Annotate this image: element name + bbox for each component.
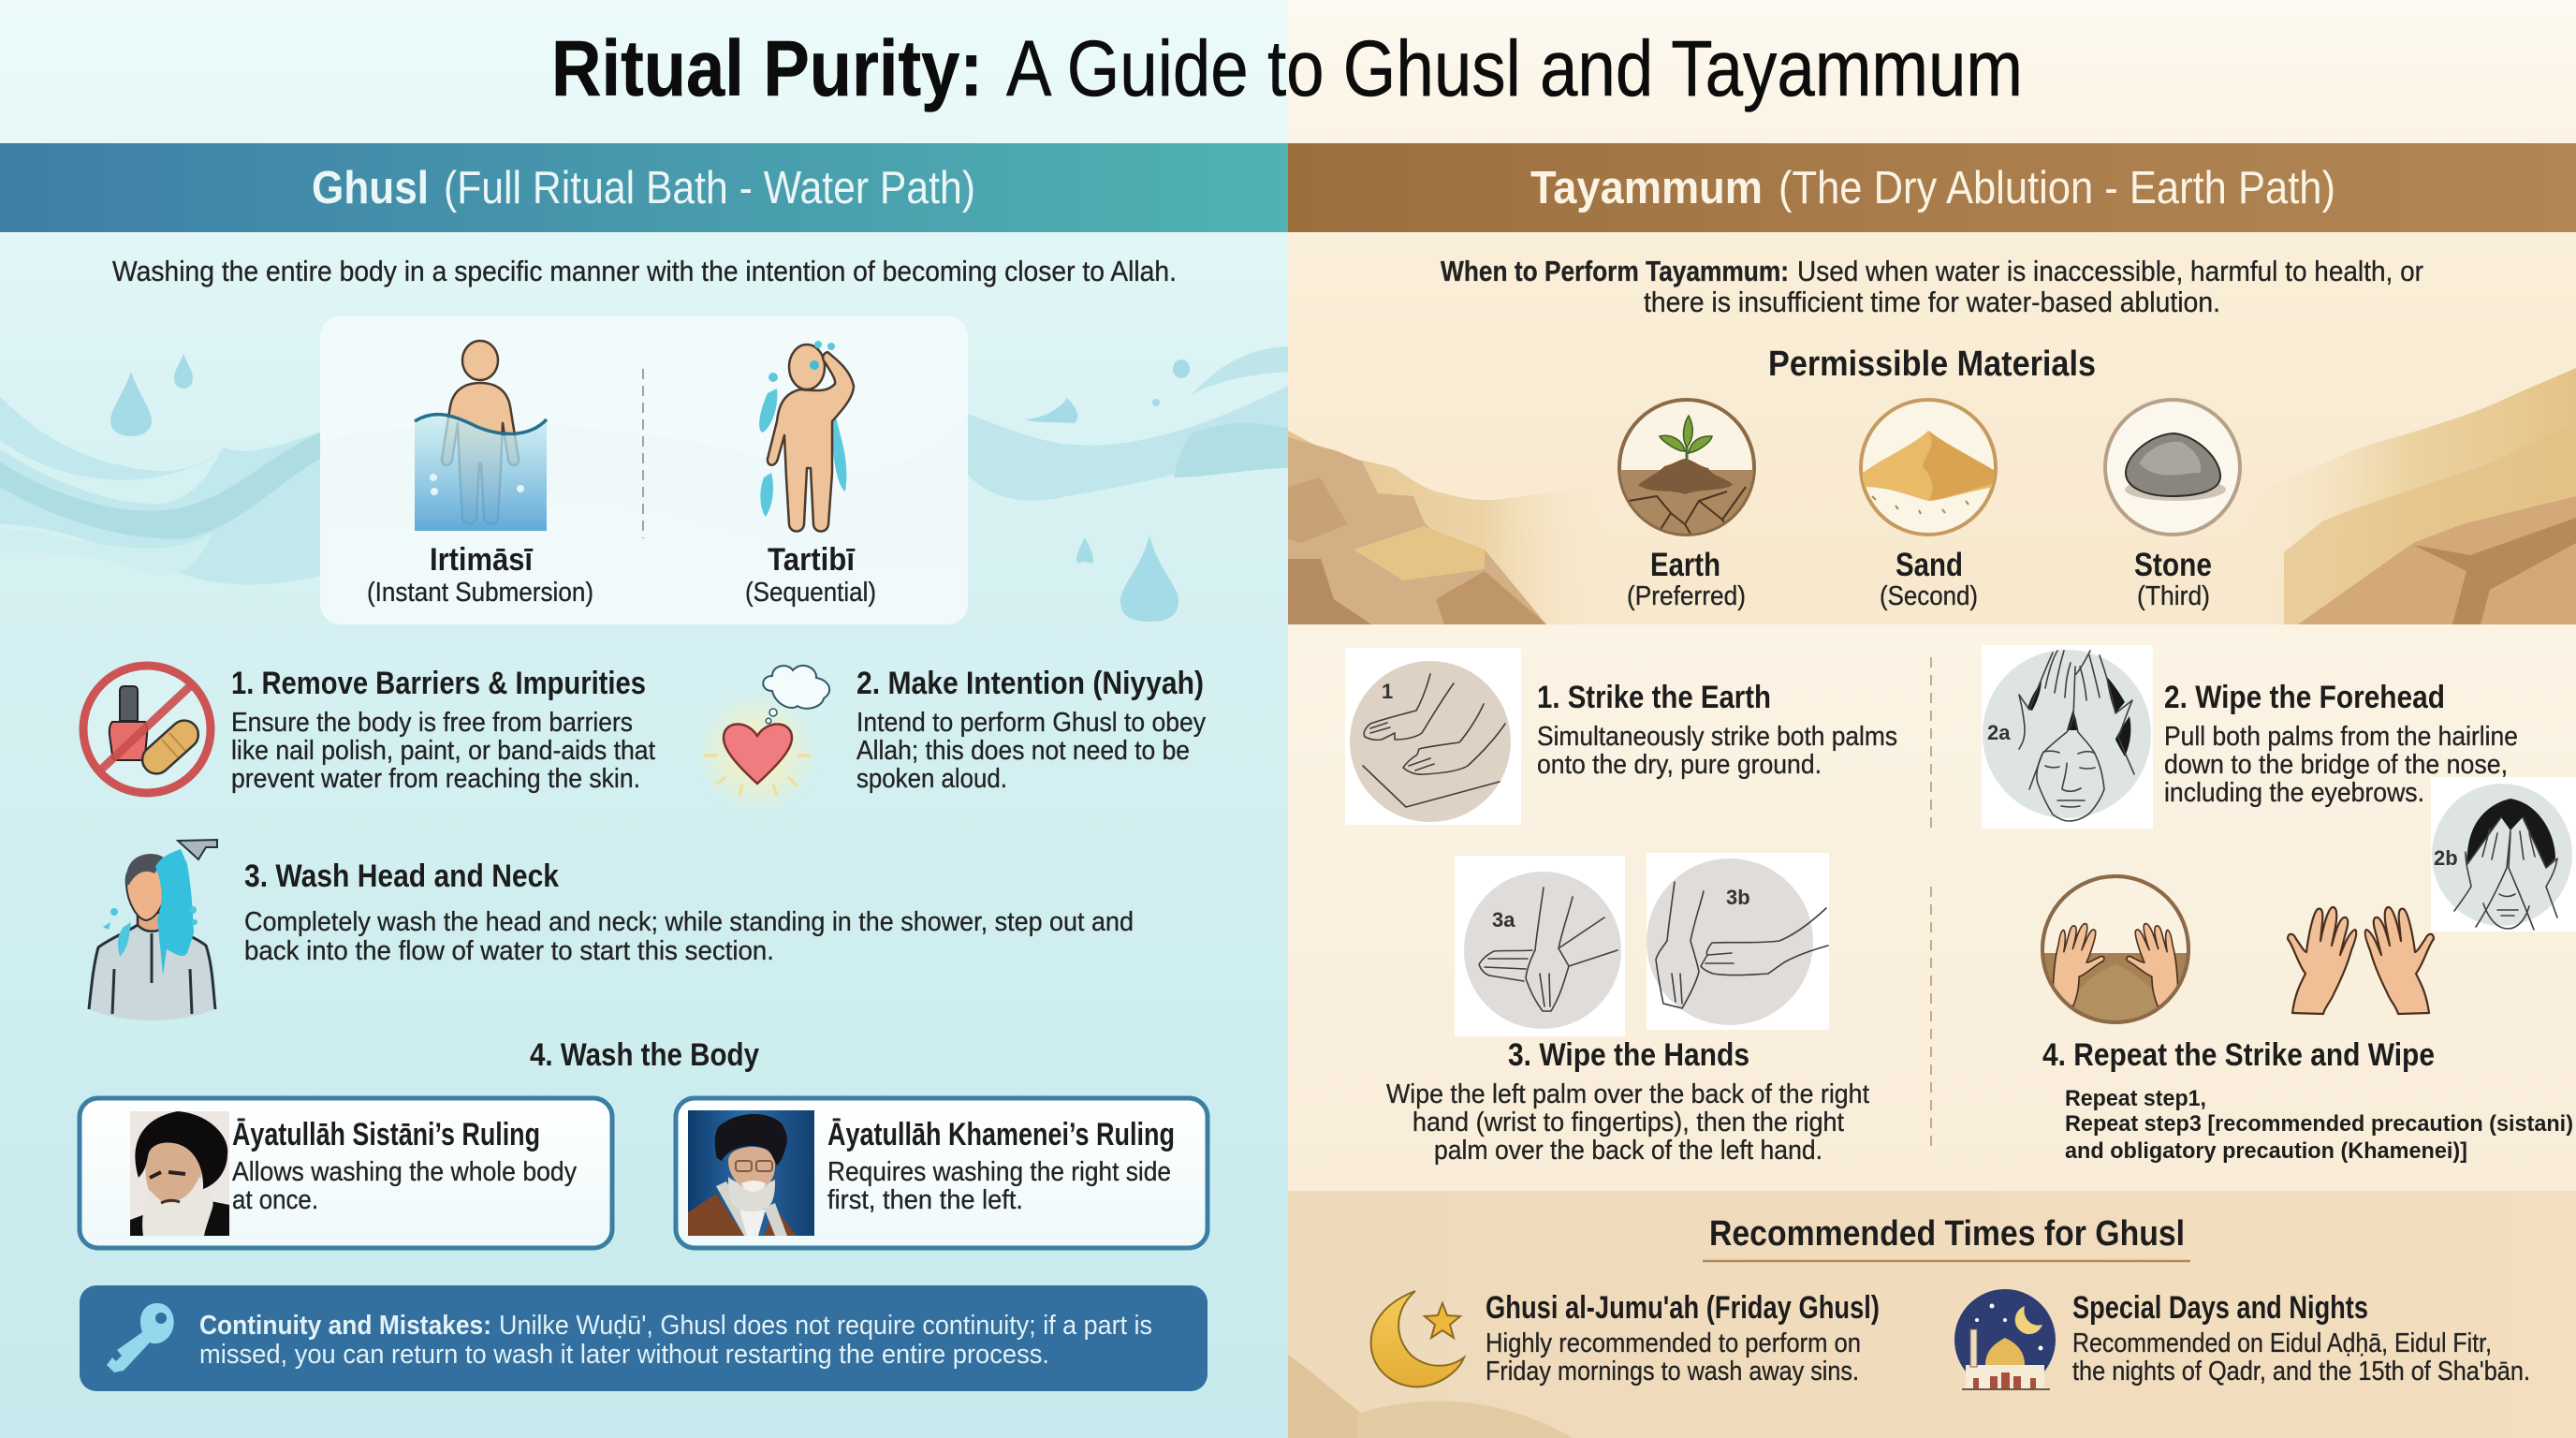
icon: hands on earth — [2032, 876, 2199, 1037]
title — [551, 24, 2023, 112]
step 3: wash head and neck — [89, 840, 1134, 1020]
label: Tartibi — [745, 542, 876, 608]
step 4 heading: wash the body: 4. Wash the Body — [530, 1037, 759, 1073]
panel: ghusl types — [320, 316, 968, 624]
icon: hands striking ground — [1345, 648, 1521, 825]
step 1: remove barriers: prevent water from reaching the skin. — [231, 764, 640, 794]
card: Khamenei ruling: first, then the left. — [827, 1185, 1023, 1215]
step 1: remove barriers — [81, 664, 655, 795]
material: sand — [1861, 400, 1998, 611]
tayammum step 2: wipe the forehead: 2. Wipe the Forehead — [2164, 680, 2445, 715]
title: Ritual Purity: — [551, 24, 983, 112]
tayammum step 4: repeat the strike and wipe: 4. Repeat the Strike and Wipe — [2042, 1037, 2435, 1073]
icon: immersed person — [415, 341, 547, 531]
step 2: make intention — [695, 666, 1206, 814]
step 2: make intention: Allah; this does not need to be — [856, 736, 1190, 766]
tayammum step 1: strike the earth — [1345, 648, 1897, 825]
tayammum step 2: wipe the forehead: Pull both palms from the hairline — [2164, 722, 2518, 752]
heading: permissible materials: Permissible Materials — [1768, 345, 2096, 384]
icon: 2b hands over eyes — [2431, 777, 2576, 932]
decorative water drops — [110, 354, 1190, 622]
tayammum step 2: wipe the forehead — [1982, 645, 2576, 932]
tayammum step 4: repeat the strike and wipe: Repeat step3 [recommended precaution (sistani) — [2065, 1111, 2573, 1137]
portrait: Khamenei — [688, 1110, 814, 1236]
card: Khamenei ruling — [676, 1098, 1208, 1248]
icon: mosque at night — [1954, 1289, 2056, 1390]
tayammum step 3: wipe the hands: palm over the back of the left hand. — [1434, 1136, 1822, 1166]
tayammum step 2: wipe the forehead: down to the bridge of the nose, — [2164, 750, 2508, 780]
recommended: special days and nights: Recommended on Eidul Aḍḥā, Eidul Fitr, — [2072, 1328, 2492, 1358]
label: Irtimasi: (Instant Submersion) — [367, 578, 593, 608]
tayammum step 3: wipe the hands: hand (wrist to fingertips), then the right — [1412, 1108, 1844, 1137]
tayammum step 1: strike the earth: onto the dry, pure ground. — [1537, 750, 1822, 780]
portrait: Sistani — [130, 1111, 229, 1236]
Tayammum: when to perform: When to Perform Tayammum: — [1441, 255, 1789, 287]
dashed dividers — [1930, 657, 1932, 1152]
card: Sistani ruling: at once. — [232, 1185, 318, 1215]
icon: person washing sequentially — [759, 341, 854, 532]
recommended: Friday Ghusl: Ghusi al-Jumu'ah (Friday Ghusl) — [1486, 1290, 1880, 1326]
Tayammum: when to perform — [1441, 255, 2423, 318]
icon: open hands — [2288, 907, 2434, 1014]
icon: heart and thought cloud — [695, 666, 829, 814]
icon: 3b — [1647, 853, 1829, 1030]
icon: 3a: 3a — [1492, 908, 1515, 932]
material: earth — [1615, 400, 1760, 611]
icon: 3b: 3b — [1726, 886, 1750, 909]
label: Irtimasi: Irtimāsī — [430, 542, 533, 578]
icon: no nail polish or band-aid — [81, 664, 212, 795]
step 2: make intention: Intend to perform Ghusl to obey — [856, 708, 1206, 738]
label: Tartibi: (Sequential) — [745, 578, 876, 608]
tayammum step 4: repeat the strike and wipe: and obligatory precaution (Khamenei)] — [2065, 1138, 2467, 1164]
background: earth panel — [1288, 0, 2576, 1438]
step 2: make intention: 2. Make Intention (Niyyah) — [856, 666, 1204, 701]
icon: 3a — [1455, 856, 1625, 1036]
tayammum step 3: wipe the hands — [1386, 853, 1869, 1166]
recommended: Friday Ghusl — [1371, 1290, 1880, 1387]
header: Tayammum: Tayammum — [1530, 163, 1763, 213]
header: Tayammum — [1288, 143, 2576, 232]
card: Sistani ruling: Āyatullāh Sistāni’s Ruling — [232, 1117, 540, 1152]
material: sand: (Second) — [1880, 581, 1978, 611]
material: sand: Sand — [1895, 547, 1963, 583]
recommended: special days and nights — [1954, 1289, 2530, 1390]
tayammum step 1: strike the earth: Simultaneously strike both palms — [1537, 722, 1897, 752]
tayammum step 3: wipe the hands: 3. Wipe the Hands — [1508, 1037, 1749, 1073]
header: Ghusl: (Full Ritual Bath - Water Path) — [444, 163, 975, 213]
recommended: special days and nights: Special Days and Nights — [2072, 1290, 2368, 1326]
card: Khamenei ruling: Requires washing the right side — [827, 1157, 1171, 1187]
Tayammum: when to perform: there is insufficient time for water-based ablution. — [1644, 286, 2220, 318]
tayammum step 2: wipe the forehead: including the eyebrows. — [2164, 778, 2424, 808]
material: earth: Earth — [1650, 547, 1720, 583]
Ghusl definition: Washing the entire body in a specific manner with the intention of becoming closer to Allah. — [112, 255, 1177, 287]
header: Tayammum: (The Dry Ablution - Earth Path) — [1778, 163, 2335, 213]
step 3: wash head and neck: 3. Wash Head and Neck — [244, 858, 559, 894]
card: Sistani ruling — [80, 1098, 612, 1248]
background: water panel — [0, 0, 1288, 1438]
step 1: remove barriers: like nail polish, paint, or band-aids that — [231, 736, 655, 766]
tayammum step 4: repeat the strike and wipe — [2032, 876, 2573, 1164]
callout: continuity and mistakes: missed, you can return to wash it later without restarting the entire process. — [199, 1340, 1049, 1370]
step 2: make intention: spoken aloud. — [856, 764, 1007, 794]
label: Tartibi: Tartibī — [768, 542, 856, 578]
divider — [642, 369, 644, 538]
card: Khamenei ruling: Āyatullāh Khamenei’s Ruling — [827, 1117, 1175, 1152]
header: Ghusl — [0, 143, 1288, 232]
icon: 2a hands on forehead — [1982, 645, 2153, 829]
icon: person under shower — [89, 840, 217, 1020]
callout: continuity and mistakes — [80, 1285, 1208, 1391]
material: stone: (Third) — [2137, 581, 2210, 611]
step 1: remove barriers: 1. Remove Barriers & Impurities — [231, 666, 646, 701]
material: stone: Stone — [2134, 547, 2212, 583]
icon: key — [107, 1303, 174, 1372]
icon: hands striking ground: 1 — [1382, 680, 1393, 703]
heading: recommended times: Recommended Times for Ghusl — [1709, 1214, 2185, 1254]
material: stone — [2105, 400, 2240, 611]
icon: crescent and star — [1371, 1291, 1464, 1387]
icon: 2b hands over eyes: 2b — [2434, 846, 2458, 870]
icon: 2a hands on forehead: 2a — [1987, 721, 2011, 744]
step 3: wash head and neck: back into the flow of water to start this section. — [244, 936, 774, 966]
tayammum step 3: wipe the hands: Wipe the left palm over the back of the right — [1386, 1079, 1869, 1109]
step 3: wash head and neck: Completely wash the head and neck; while standing in the shower, step out and — [244, 907, 1134, 937]
card: Sistani ruling: Allows washing the whole body — [232, 1157, 577, 1187]
recommended: Friday Ghusl: Highly recommended to perform on — [1486, 1328, 1861, 1358]
callout: continuity and mistakes: Unilke Wuḍū', Ghusl does not require continuity; if a part is — [499, 1311, 1152, 1341]
label: Irtimasi — [367, 542, 593, 608]
tayammum step 1: strike the earth: 1. Strike the Earth — [1537, 680, 1771, 715]
recommended: Friday Ghusl: Friday mornings to wash away sins. — [1486, 1357, 1859, 1387]
header: Ghusl: Ghusl — [312, 163, 429, 213]
title: A Guide to Ghusl and Tayammum — [1006, 24, 2023, 112]
callout: continuity and mistakes: Continuity and Mistakes: — [199, 1311, 491, 1341]
tayammum step 4: repeat the strike and wipe: Repeat step1, — [2065, 1086, 2206, 1111]
Tayammum: when to perform: Used when water is inaccessible, harmful to health, or — [1797, 255, 2423, 287]
step 1: remove barriers: Ensure the body is free from barriers — [231, 708, 633, 738]
material: earth: (Preferred) — [1627, 581, 1746, 611]
